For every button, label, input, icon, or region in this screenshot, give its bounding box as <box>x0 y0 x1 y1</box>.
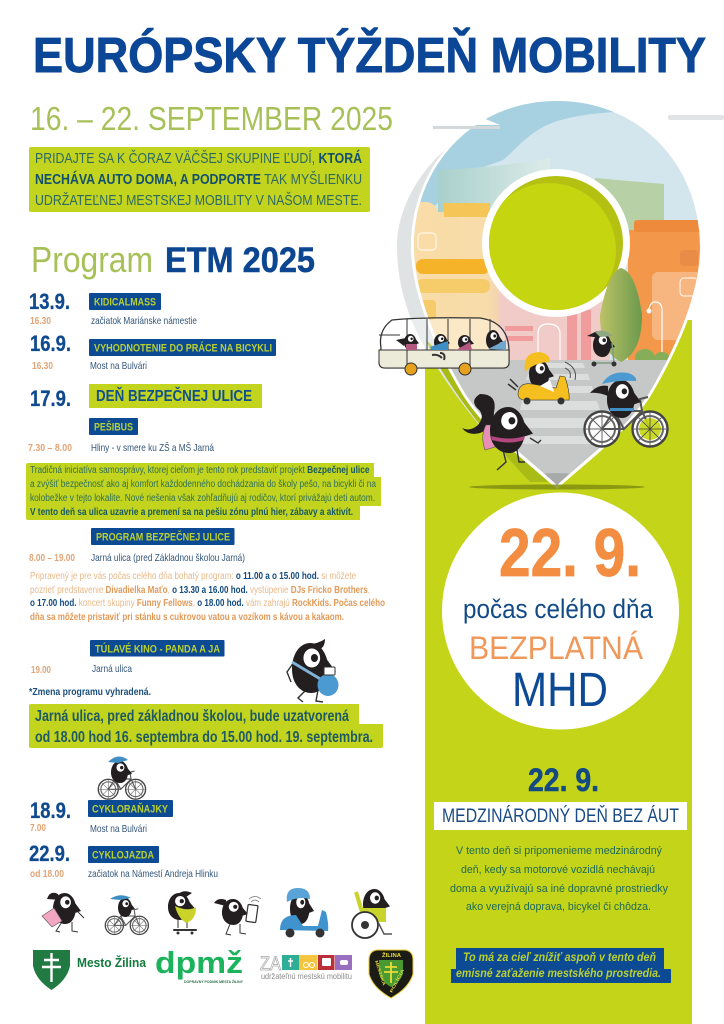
date range: 16. – 22. SEPTEMBER 2025 <box>30 100 393 137</box>
subtitle: počas celého dňa <box>463 594 654 624</box>
icon: kick scooter mascot <box>587 331 616 366</box>
túlavé kino: Jarná ulica <box>92 663 132 675</box>
logo: Mesto Žilina <box>33 950 147 990</box>
car free day banner <box>434 802 687 830</box>
ground shadow <box>469 484 645 490</box>
program description: pozrieť predstavenie Divadielka Maťo, o 13.30 a 16.00 hod. vystúpenie DJs Fricko Brothers, <box>30 585 370 596</box>
program bezpečnej ulice: Jarná ulica (pred Základnou školou Jarná) <box>91 552 245 564</box>
event 17.9. heading: DEŇ BEZPEČNEJ ULICE <box>96 386 252 405</box>
event 16.9.: Most na Bulvári <box>90 360 147 372</box>
pešibus description <box>26 463 381 520</box>
centre circle <box>482 169 630 317</box>
event 22.9.: od 18.00 <box>30 869 64 880</box>
pešibus description: a zvýšiť bezpečnosť ako aj komfort každodenného dochádzania do školy pešo, na bicykli či na <box>30 479 376 490</box>
program description: Pripravený je pre vás počas celého dňa bohatý program: o 11.00 a o 15.00 hod. si môžete <box>30 571 356 582</box>
goal callout: To má za cieľ znížiť aspoň v tento deň <box>463 952 656 964</box>
event 16.9.: 16.30 <box>32 361 53 372</box>
icon: mascot bus <box>379 318 509 375</box>
túlavé kino: 19.00 <box>31 665 51 676</box>
icon: cyclist mascot <box>98 756 146 799</box>
logo: DPMŽ: dpmž <box>155 945 243 980</box>
icon: skateboard mascot <box>168 891 197 934</box>
icon: cyclist mascot <box>584 372 668 446</box>
program description <box>30 571 385 623</box>
icon: blue scooter mascot <box>280 888 328 938</box>
icon: mascot with phone <box>214 896 261 935</box>
intro callout: PRIDAJTE SA K ČORAZ VÄČŠEJ SKUPINE ĽUDÍ, KTORÁ <box>35 150 362 167</box>
icon: mascot with pink bag <box>42 893 84 932</box>
pešibus: 7.30 – 8.00 <box>28 443 72 454</box>
pin outline <box>411 98 703 489</box>
pešibus description: V tento deň sa ulica uzavrie a premení sa na pešiu zónu plnú hier, zábavy a aktivít. <box>30 507 353 518</box>
car free day description <box>450 845 668 913</box>
event 13.9.: 13.9. <box>29 289 70 314</box>
intro callout <box>29 147 370 212</box>
pešibus description: Tradičná iniciatíva samosprávy, ktorej cieľom je tento rok predstaviť projekt Bezpečnej ulice <box>30 465 370 476</box>
event 18.9.: 18.9. <box>30 798 71 823</box>
event 22.9. <box>29 841 218 880</box>
event 13.9.: 16.30 <box>30 316 51 327</box>
icon: cyclist mascot small <box>105 895 148 934</box>
intro callout: UDRŽATEĽNEJ MESTSKEJ MOBILITY V NAŠOM MESTE. <box>35 192 362 209</box>
car free day description: V tento deň si pripomenieme medzinárodný <box>456 845 662 857</box>
event 17.9. heading <box>30 384 262 411</box>
date: 22. 9. <box>499 515 641 591</box>
icon: walking girl mascot <box>462 394 541 470</box>
túlavé kino <box>31 640 224 676</box>
program bezpečnej ulice: PROGRAM BEZPEČNEJ ULICE <box>96 530 230 544</box>
event 22.9.: 22.9. <box>29 841 70 866</box>
event 16.9.: VYHODNOTENIE DO PRÁCE NA BICYKLI <box>94 342 272 354</box>
icon: mascot with camera <box>287 639 338 702</box>
road closure notice: Jarná ulica, pred základnou školou, bude uzatvorená <box>35 708 349 725</box>
circle: free public transport <box>442 492 679 730</box>
logo: Mestská polícia: POLÍCIA <box>388 968 405 993</box>
event 13.9.: začiatok Mariánske námestie <box>91 315 197 327</box>
car free day description: doma a využívajú sa iné dopravné prostriedky <box>450 883 668 895</box>
goal callout: emisné zaťaženie mestského prostredia. <box>456 968 661 980</box>
intro callout: NECHÁVA AUTO DOMA, A PODPORTE TAK MYŠLIENKU <box>35 171 362 188</box>
event 22.9.: CYKLOJAZDA <box>92 850 154 862</box>
túlavé kino: TÚLAVÉ KINO - PANDA A JA <box>95 642 220 656</box>
program heading: ETM 2025 <box>165 241 315 280</box>
logo: Mestská polícia <box>369 950 413 998</box>
event 18.9.: CYKLORAŇAJKY <box>92 802 168 816</box>
event 18.9.: 7.00 <box>30 823 46 834</box>
event 22.9.: začiatok na Námestí Andreja Hlinku <box>88 868 218 880</box>
pin shadow <box>397 118 548 482</box>
event 13.9. <box>29 289 197 327</box>
cloud bars <box>433 118 500 125</box>
program description: dňa sa môžete pristaviť pri stánku s cukrovou vatou a vozíkom s kávou a kakaom. <box>30 612 344 623</box>
logo: Mesto Žilina: Mesto Žilina <box>77 955 147 970</box>
program bezpečnej ulice <box>29 528 245 564</box>
tree front <box>600 268 642 362</box>
road closure notice: od 18.00 hod 16. septembra do 15.00 hod. 19. septembra. <box>35 729 373 746</box>
pešibus: PEŠIBUS <box>94 420 133 434</box>
icon: wheelchair mascot <box>352 889 392 938</box>
icon: yellow scooter mascot <box>508 352 576 404</box>
event 18.9.: Most na Bulvári <box>90 823 147 835</box>
pin illustration <box>397 95 724 497</box>
program description: o 17.00 hod. koncert skupiny Funny Fellows, o 18.00 hod. vám zahrajú RockKids. Počas celého <box>30 598 385 609</box>
event 16.9.: 16.9. <box>30 331 71 356</box>
program change note: *Zmena programu vyhradená. <box>29 687 151 698</box>
program bezpečnej ulice: 8.00 – 19.00 <box>29 553 75 564</box>
event 16.9. <box>30 331 276 372</box>
pin scene <box>410 95 707 497</box>
car free day date: 22. 9. <box>528 762 599 798</box>
pešibus <box>28 418 214 454</box>
mascot row <box>42 888 392 938</box>
program heading <box>31 239 315 280</box>
panel: green column <box>425 320 692 1024</box>
goal callout <box>451 948 671 983</box>
car free day description: deň, kedy sa motorové vozidlá nechávajú <box>461 864 655 876</box>
event 13.9.: KIDICALMASS <box>94 296 156 308</box>
road closure notice <box>29 704 383 748</box>
pešibus description: kolobežke v tejto lokalite. Nové riešenia však zohľadňujú aj rodičov, ktorí privážajú deti autom. <box>30 493 375 504</box>
pešibus: Hliny - v smere ku ZŠ a MŠ Jarná <box>91 441 214 454</box>
program heading: Program <box>31 239 153 280</box>
event 18.9. <box>30 798 173 835</box>
event 17.9. heading: 17.9. <box>30 386 71 411</box>
logo: ZA udržateľnú mestskú mobilitu <box>260 954 352 981</box>
logo: DPMŽ: DOPRAVNÝ PODNIK MESTA ŽILINY <box>184 979 244 984</box>
car free day banner: MEDZINÁRODNÝ DEŇ BEZ ÁUT <box>442 805 679 827</box>
car free day description: ako verejná doprava, bicykel či chôdza. <box>466 901 651 913</box>
logo: Mestská polícia: MESTSKÁ <box>374 960 387 986</box>
transit label: MHD <box>512 664 608 717</box>
logo: ZA udržateľnú mestskú mobilitu: ZA <box>260 954 281 975</box>
logo: ZA udržateľnú mestskú mobilitu: udržateľnú mestskú mobilitu <box>261 972 352 981</box>
free label: BEZPLATNÁ <box>469 630 644 666</box>
logo: Mestská polícia: ŽILINA <box>382 951 401 959</box>
